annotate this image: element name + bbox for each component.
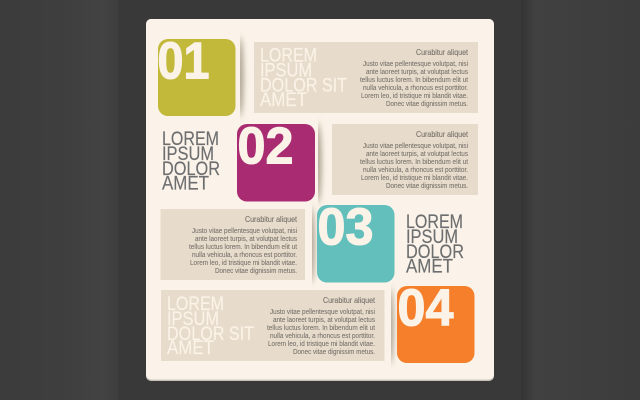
body text 04: ante laoreet turpis, at volutpat lectus <box>273 317 375 324</box>
body text 04: Justo vitae pellentesque volutpat, nisi <box>270 309 375 316</box>
body text 01: Donec vitae dignissim metus. <box>386 101 468 108</box>
number tile 02: 02 <box>238 118 294 176</box>
text panel 03: ante laoreet turpis, at volutpat lectus <box>195 236 297 243</box>
heading 01: DOLOR SIT <box>260 76 347 96</box>
side heading 02: AMET <box>162 174 209 194</box>
number tile 01: 01 <box>158 32 210 90</box>
heading 04: DOLOR SIT <box>167 324 254 345</box>
heading 01: LOREM <box>260 46 317 66</box>
text panel 03 <box>160 209 305 280</box>
panel: block 03 <box>160 198 464 283</box>
text panel 01 <box>254 42 478 113</box>
heading 04 <box>167 294 254 359</box>
number tile 03 <box>317 198 394 282</box>
body text 01: Curabitur aliquet <box>416 48 469 57</box>
body text 04: tellus luctus lorem. In bibendum elit ut <box>267 325 375 332</box>
side heading 02: DOLOR <box>162 159 220 180</box>
text panel 02: Donec vitae dignissim metus. <box>386 183 468 190</box>
text panel 02: Justo vitae pellentesque volutpat, nisi <box>363 143 468 150</box>
number tile 04: 04 <box>398 280 454 338</box>
text panel 02: tellus luctus lorem. In bibendum elit ut <box>360 159 468 166</box>
body text 01: tellus luctus lorem. In bibendum elit ut <box>360 77 468 84</box>
panel: block 02 <box>162 118 478 203</box>
body text 01: Lorem leo, id tristique mi blandit vitae. <box>361 93 468 100</box>
side heading 02: LOREM <box>162 129 219 150</box>
body text 04: Lorem leo, id tristique mi blandit vitae. <box>268 341 375 348</box>
body text 01: Justo vitae pellentesque volutpat, nisi <box>363 61 468 68</box>
number tile 04 <box>397 280 474 363</box>
heading 01: IPSUM <box>260 60 312 82</box>
side heading 03: DOLOR <box>406 242 464 263</box>
text panel 03: Donec vitae dignissim metus. <box>215 268 297 275</box>
text panel 02: ante laoreet turpis, at volutpat lectus <box>366 151 468 158</box>
heading 04: LOREM <box>167 294 224 315</box>
panel shadow <box>314 123 322 203</box>
side heading 02: IPSUM <box>162 144 214 165</box>
number tile 02 <box>237 118 315 202</box>
panel shadow <box>236 37 244 117</box>
card <box>146 19 494 381</box>
body text 01: nulla vehicula, a rhoncus est porttitor. <box>363 85 468 92</box>
text panel 02 <box>332 124 478 195</box>
text panel 02: Curabitur aliquet <box>416 130 469 139</box>
side heading 02 <box>162 129 220 194</box>
text panel 03: nulla vehicula, a rhoncus est porttitor. <box>192 252 297 259</box>
body text 04: Donec vitae dignissim metus. <box>293 349 375 356</box>
heading 01 <box>260 46 347 111</box>
body text 01 <box>360 48 469 108</box>
panel: block 04 <box>161 280 474 364</box>
body text 04: Curabitur aliquet <box>323 296 376 305</box>
text panel 04 <box>161 290 384 361</box>
body text 04 <box>267 296 376 356</box>
text panel 03: Justo vitae pellentesque volutpat, nisi <box>192 228 297 235</box>
panel shadow <box>391 286 397 366</box>
panel: block 01 <box>158 32 478 117</box>
heading 01: AMET <box>260 90 307 111</box>
heading 04: AMET <box>167 338 214 359</box>
side heading 03 <box>406 212 464 278</box>
text panel 02: nulla vehicula, a rhoncus est porttitor. <box>363 167 468 174</box>
text panel 02: Lorem leo, id tristique mi blandit vitae. <box>361 175 468 182</box>
panel shadow <box>312 206 317 284</box>
text panel 03: Curabitur aliquet <box>245 215 298 224</box>
body text 04: nulla vehicula, a rhoncus est porttitor. <box>270 333 375 340</box>
heading 04: IPSUM <box>167 309 219 330</box>
number tile 03: 03 <box>318 198 374 256</box>
side heading 03: LOREM <box>406 212 463 233</box>
number tile 01 <box>158 32 236 116</box>
side heading 03: IPSUM <box>406 227 458 248</box>
text panel 03: Lorem leo, id tristique mi blandit vitae. <box>190 260 297 267</box>
side heading 03: AMET <box>406 256 453 278</box>
body text 01: ante laoreet turpis, at volutpat lectus <box>366 69 468 76</box>
text panel 03: tellus luctus lorem. In bibendum elit ut <box>189 244 297 251</box>
